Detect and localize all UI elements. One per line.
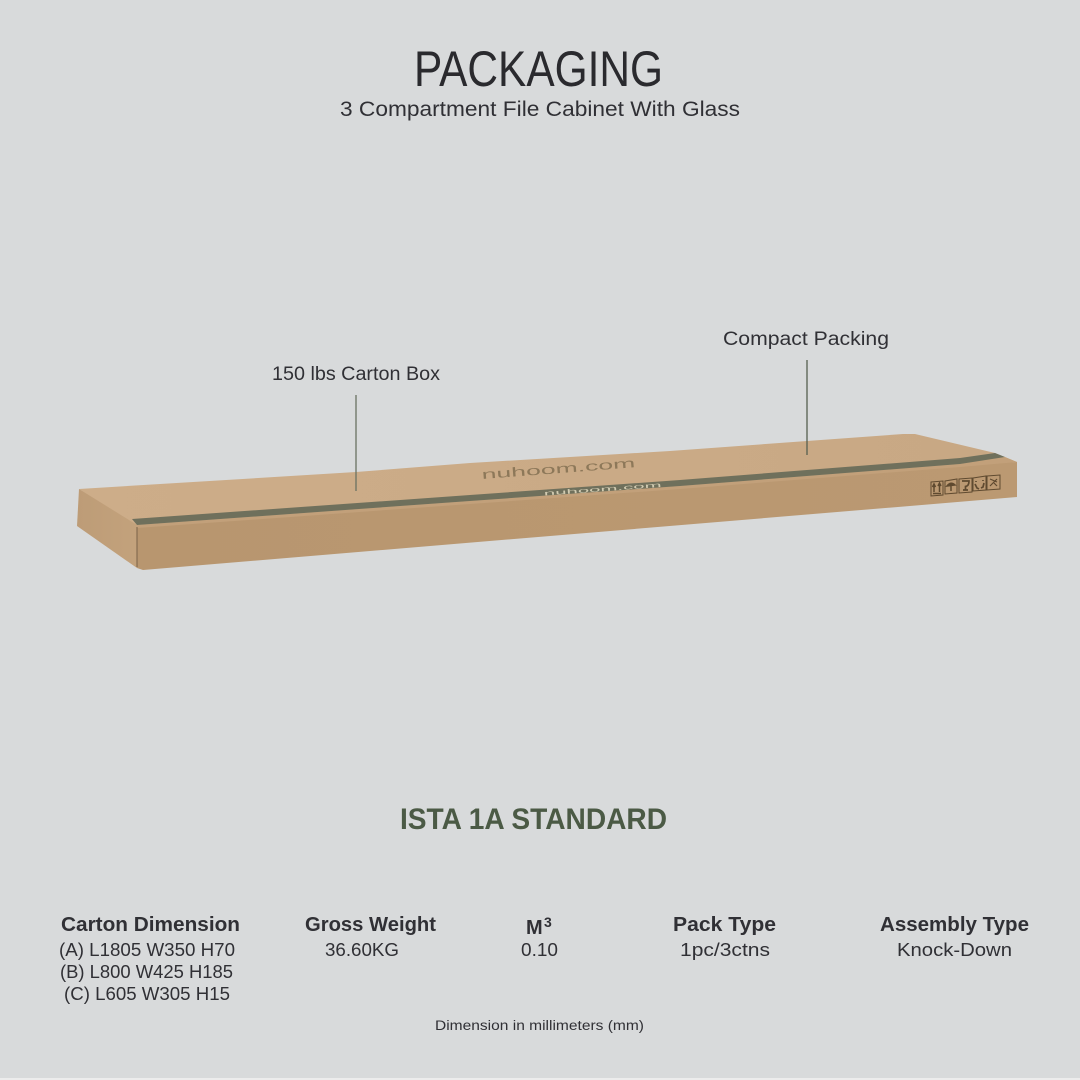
spec: cubic metres xyxy=(521,914,558,960)
spec: gross weight xyxy=(305,914,436,960)
green tape strip xyxy=(132,453,1005,525)
spec: carton dimension xyxy=(59,914,240,1004)
brand text on strip: nuhoom.com xyxy=(544,482,662,497)
spec: carton dimension: Carton Dimension xyxy=(61,914,240,936)
spec: assembly type: Assembly Type xyxy=(880,914,1029,936)
spec: carton dimension: (A) L1805 W350 H70 xyxy=(59,939,235,960)
box left side xyxy=(77,489,137,568)
carton box illustration xyxy=(77,434,1017,570)
spec: assembly type xyxy=(880,914,1029,960)
spec: pack type: 1pc/3ctns xyxy=(680,939,770,960)
callout: 150 lbs carton box: 150 lbs Carton Box xyxy=(272,364,441,385)
spec: cubic metres: 3 xyxy=(544,914,552,930)
front lip highlight xyxy=(137,457,1017,528)
box front face xyxy=(137,462,1017,570)
title: PACKAGING xyxy=(414,41,663,97)
spec: pack type: Pack Type xyxy=(673,914,776,936)
box top face xyxy=(79,434,1017,528)
spec: carton dimension: (B) L800 W425 H185 xyxy=(60,961,233,982)
handling icons xyxy=(931,475,1000,496)
spec: carton dimension: (C) L605 W305 H15 xyxy=(64,983,230,1004)
spec: cubic metres: M xyxy=(526,917,543,939)
spec: cubic metres: 0.10 xyxy=(521,939,558,960)
brand text on top: nuhoom.com xyxy=(481,455,636,482)
spec: gross weight: 36.60KG xyxy=(325,939,399,960)
footnote: Dimension in millimeters (mm) xyxy=(435,1018,644,1033)
spec: gross weight: Gross Weight xyxy=(305,914,436,936)
spec: assembly type: Knock-Down xyxy=(897,939,1012,960)
section heading: ISTA 1A STANDARD xyxy=(400,803,667,836)
callout: compact packing: Compact Packing xyxy=(723,329,889,350)
spec: pack type xyxy=(673,914,776,960)
subtitle: 3 Compartment File Cabinet With Glass xyxy=(340,98,740,121)
